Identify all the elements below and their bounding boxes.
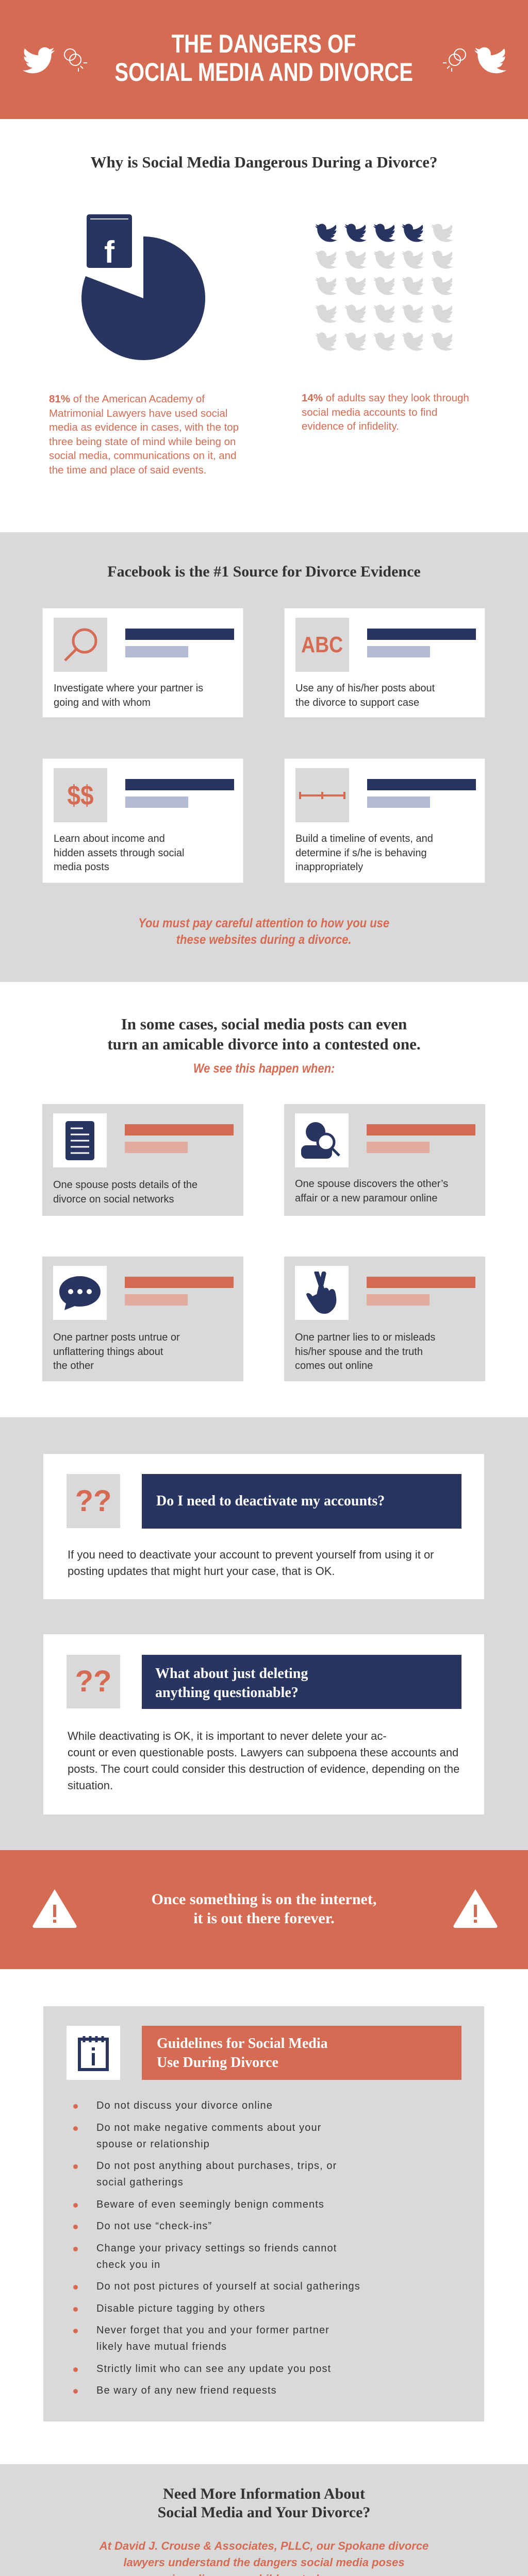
card: income: Learn about income and: [54, 833, 165, 844]
card: investigate: [42, 608, 243, 718]
icon: person search: [295, 1113, 349, 1167]
header band: [0, 0, 528, 119]
banner: deactivate question: Do I need to deactivate my accounts?: [156, 1493, 385, 1509]
card: income: media posts: [54, 861, 109, 873]
icon: warning left: [33, 1889, 76, 1928]
panel: deactivate questions: [0, 1417, 528, 1850]
text: firm callout: lawyers understand the dangers social media poses: [123, 2556, 405, 2569]
panel: more information: [0, 2464, 528, 2576]
icon: right rings: [443, 48, 466, 72]
card: lies: his/her spouse and the truth: [295, 1346, 423, 1357]
list: guidelines: Do not use “check-ins”: [96, 2221, 212, 2232]
icon: question marks: [67, 1655, 120, 1708]
icon: document: [53, 1113, 107, 1167]
heading: amicable to contested: turn an amicable divorce into a contested one.: [107, 1035, 421, 1053]
card: untrue posts: the other: [53, 1360, 94, 1371]
card: discovers affair: One spouse discovers the other’s: [295, 1178, 448, 1190]
card: timeline: inappropriately: [295, 861, 363, 873]
heading: why dangerous: Why is Social Media Dangerous During a Divorce?: [90, 153, 438, 171]
callout: pay attention: [139, 916, 389, 947]
callout: pay attention: You must pay careful attention to how you use: [139, 916, 389, 930]
card: discovers affair: affair or a new paramour online: [295, 1192, 437, 1204]
title: [115, 29, 413, 87]
list: guidelines: Beware of even seemingly benign comments: [96, 2199, 324, 2210]
card: use posts: the divorce to support case: [295, 697, 419, 708]
icon: ABC: [295, 618, 349, 672]
heading: need more info: Social Media and Your Divorce?: [158, 2504, 370, 2521]
list: guidelines: social gatherings: [96, 2177, 184, 2188]
list: guidelines: Never forget that you and your former partner: [96, 2325, 329, 2336]
card: income: [42, 758, 243, 883]
stat 14% text: 14% of adults say they look through social media accounts to find evidence of infidelity.: [302, 392, 469, 432]
text: forever: [152, 1891, 376, 1927]
banner: guidelines heading: Guidelines for Social Media: [157, 2036, 328, 2052]
icon: notepad: [67, 2026, 120, 2080]
banner: internet forever: [0, 1850, 528, 1969]
icon: speech bubble: [53, 1266, 107, 1320]
list: guidelines: Strictly limit who can see any update you post: [96, 2363, 331, 2374]
icon: facebook: [87, 214, 132, 269]
list: guidelines: likely have mutual friends: [96, 2341, 227, 2352]
card: timeline: [284, 758, 485, 883]
icon: facebook: f: [104, 235, 115, 269]
card: timeline: Build a timeline of events, and: [295, 833, 433, 844]
text: firm callout: [99, 2539, 428, 2576]
heading: amicable to contested: In some cases, social media posts can even: [121, 1015, 407, 1033]
card: investigate: going and with whom: [54, 697, 151, 708]
box: deactivate: [43, 1454, 484, 1599]
banner: guidelines heading: [142, 2026, 461, 2080]
card: posts details: divorce on social networks: [53, 1193, 174, 1205]
list: guidelines: check you in: [96, 2259, 160, 2270]
icon: crossed fingers: [295, 1266, 349, 1320]
card: untrue posts: [42, 1257, 243, 1381]
card: lies: [284, 1257, 485, 1381]
icon: warning right: [454, 1889, 497, 1928]
card: use posts: [284, 608, 485, 718]
banner: guidelines heading: Use During Divorce: [157, 2055, 278, 2071]
text: forever: Once something is on the internet,: [152, 1891, 376, 1908]
banner: deleting question: [142, 1655, 461, 1709]
list: guidelines: Be wary of any new friend requests: [96, 2385, 277, 2396]
list: guidelines: Do not post pictures of yourself at social gatherings: [96, 2281, 360, 2292]
list: guidelines: [73, 2100, 360, 2396]
banner: deleting question: anything questionable?: [155, 1685, 299, 1701]
card: lies: comes out online: [295, 1360, 373, 1371]
list: guidelines: Change your privacy settings so friends cannot: [96, 2242, 337, 2253]
panel: facebook evidence: [0, 532, 528, 982]
subheading: we see this: We see this happen when:: [193, 1061, 335, 1076]
heading: need more info: Need More Information About: [163, 2485, 365, 2502]
icon: ABC: ABC: [301, 632, 343, 657]
text: firm callout: At David J. Crouse & Associates, PLLC, our Spokane divorce: [100, 2539, 428, 2552]
list: guidelines: Do not post anything about purchases, trips, or: [96, 2160, 337, 2172]
title: THE DANGERS OF: [172, 29, 356, 58]
icon: left bird: [23, 47, 55, 73]
pie chart 81%: [81, 214, 205, 360]
card: posts details: One spouse posts details of the: [53, 1179, 197, 1191]
card: untrue posts: unflattering things about: [53, 1346, 163, 1357]
list: guidelines: Do not make negative comments about your: [96, 2122, 321, 2133]
box: deleting: [43, 1634, 484, 1815]
banner: deleting question: What about just deleting: [155, 1666, 308, 1682]
list: guidelines: spouse or relationship: [96, 2138, 210, 2149]
card: use posts: Use any of his/her posts about: [295, 683, 435, 694]
icon: dollars: [54, 768, 107, 822]
heading: amicable to contested: [107, 1015, 421, 1053]
heading: need more info: [158, 2485, 370, 2521]
card: untrue posts: One partner posts untrue or: [53, 1332, 180, 1343]
card: timeline: determine if s/he is behaving: [295, 847, 427, 858]
text: deactivate answer: If you need to deactivate your account to prevent yourself from using it or posting updates that might hurt your case, that is OK.: [68, 1548, 434, 1578]
card: investigate: Investigate where your partner is: [54, 683, 203, 694]
callout: pay attention: these websites during a divorce.: [176, 933, 352, 947]
icon: question marks: [67, 1474, 120, 1528]
icon: question marks: ??: [75, 1484, 111, 1518]
panel: guidelines: [43, 2006, 484, 2421]
title: SOCIAL MEDIA AND DIVORCE: [115, 58, 413, 87]
icon: magnifier: [54, 618, 107, 672]
banner: deactivate question: [142, 1474, 461, 1529]
bird grid 14%: [315, 224, 453, 350]
icon: right bird: [474, 47, 506, 73]
list: guidelines: Do not discuss your divorce online: [96, 2100, 273, 2111]
text: deleting answer: While deactivating is OK, it is important to never delete your ac-: [68, 1730, 387, 1742]
card: lies: One partner lies to or misleads: [295, 1332, 435, 1343]
icon: timeline: [295, 768, 349, 822]
card: income: hidden assets through social: [54, 847, 185, 858]
icon: left rings: [64, 48, 87, 72]
card: posts details: [42, 1104, 243, 1216]
icon: question marks: ??: [75, 1665, 111, 1698]
list: guidelines: Disable picture tagging by others: [96, 2303, 266, 2314]
heading: facebook #1: Facebook is the #1 Source for Divorce Evidence: [107, 563, 421, 580]
stat 81% text: 81% of the American Academy of Matrimonial Lawyers have used social media as evidence in cases, with the top three being state of mind while being on social media, communications on it, and the time and place of said events.: [49, 393, 239, 476]
text: deleting answer: count or even questionable posts. Lawyers can subpoena these accounts and posts. The court could consider this destruction of evidence, depending on the situation.: [68, 1746, 459, 1792]
text: forever: it is out there forever.: [193, 1910, 335, 1927]
icon: dollars: $$: [67, 780, 94, 811]
card: discovers affair: [284, 1104, 485, 1216]
